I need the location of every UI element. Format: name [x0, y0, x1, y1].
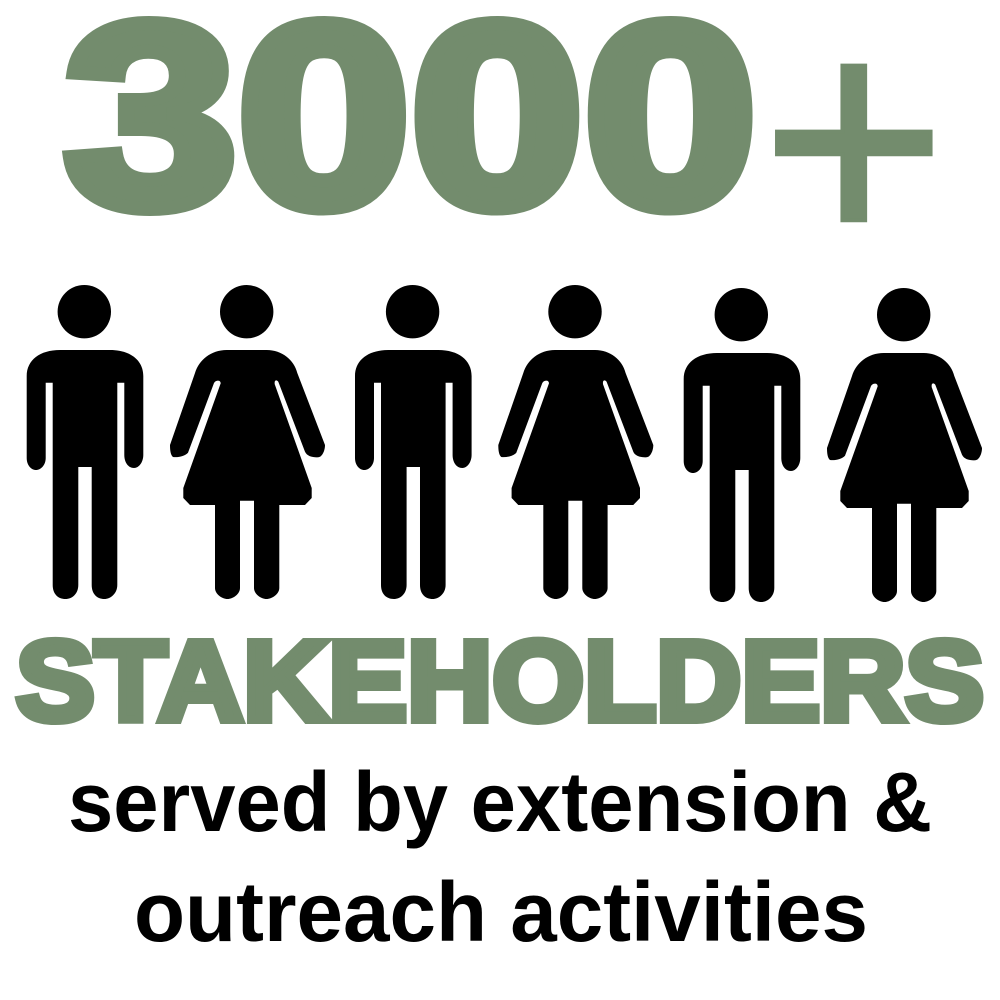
icon: woman 3 — [827, 288, 982, 602]
icon: man 3 — [684, 288, 800, 602]
icon: man 1 — [27, 285, 143, 599]
text block: description — [68, 755, 932, 959]
icon: woman 1 — [170, 285, 325, 599]
row of people icons — [27, 285, 982, 602]
text block: description: outreach activities — [134, 865, 868, 959]
heading: stakeholders: STAKEHOLDERS — [16, 618, 984, 744]
text block: description: served by extension & — [68, 755, 932, 849]
icon: man 2 — [355, 285, 472, 599]
icon: woman 2 — [498, 285, 653, 599]
